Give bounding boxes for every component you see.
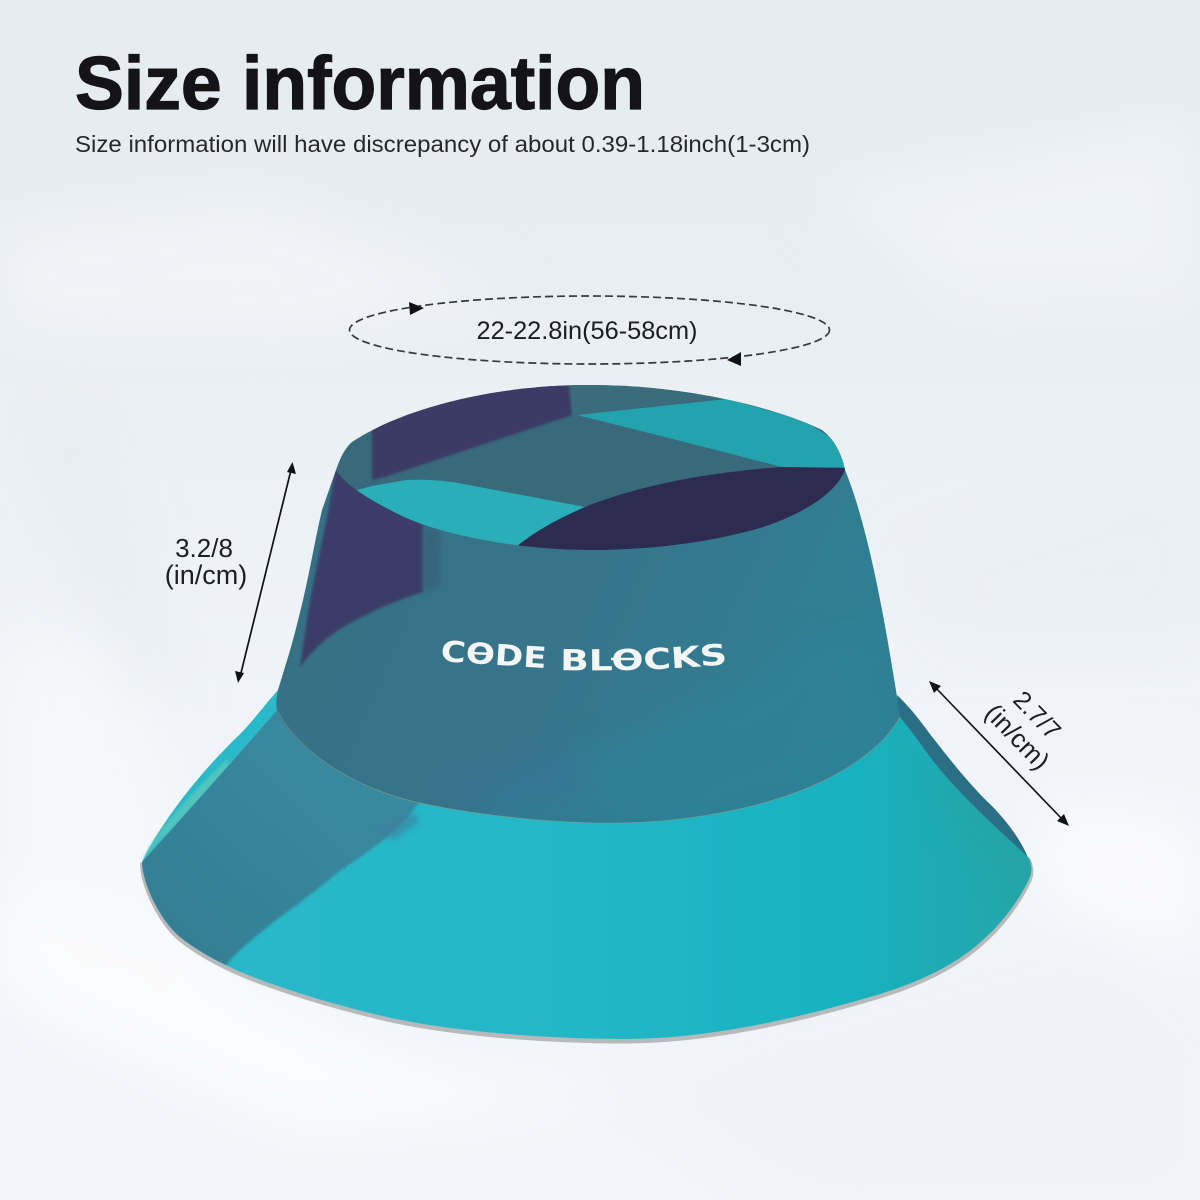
measurement: circumference <box>350 296 830 366</box>
measurement: brim width <box>929 681 1069 826</box>
dashed ellipse with arrows <box>350 296 830 366</box>
title: Size information <box>75 41 645 125</box>
brim underside grey rim <box>142 802 1031 1042</box>
brim dark panel <box>142 710 420 966</box>
crown height arrow <box>235 462 296 683</box>
crown seam <box>277 710 900 823</box>
brim front <box>142 710 1032 1039</box>
hat logo: BLOCKS <box>563 644 724 670</box>
top dark purple lower right panel <box>510 467 850 555</box>
top cyan upper right panel <box>577 399 850 468</box>
top back teal <box>572 385 718 415</box>
hat logo <box>442 640 724 670</box>
top cyan lower left panel <box>356 480 584 546</box>
circumference label: 22-22.8in(56-58cm) <box>476 317 698 345</box>
subtitle: size discrepancy note: Size information will have discrepancy of about 0.39-1.18inch(1-3cm) <box>75 131 810 157</box>
top back left purple panel <box>372 378 572 480</box>
brim back, left sliver <box>142 650 292 862</box>
measurement: crown height <box>165 462 296 683</box>
hat logo: CODE <box>442 640 544 668</box>
brim width label: 2.7/7 <box>1007 686 1066 745</box>
crown left shoulder shade <box>300 467 423 667</box>
crown top opening <box>330 378 850 555</box>
brim back, right sliver <box>897 695 1029 860</box>
crown side <box>270 460 910 830</box>
brim width unit: (in/cm) <box>979 698 1056 776</box>
brim width arrow <box>929 681 1069 826</box>
hat <box>140 385 1034 1044</box>
crown height label: 3.2/8 <box>175 533 233 563</box>
crown height unit: (in/cm) <box>165 560 247 590</box>
